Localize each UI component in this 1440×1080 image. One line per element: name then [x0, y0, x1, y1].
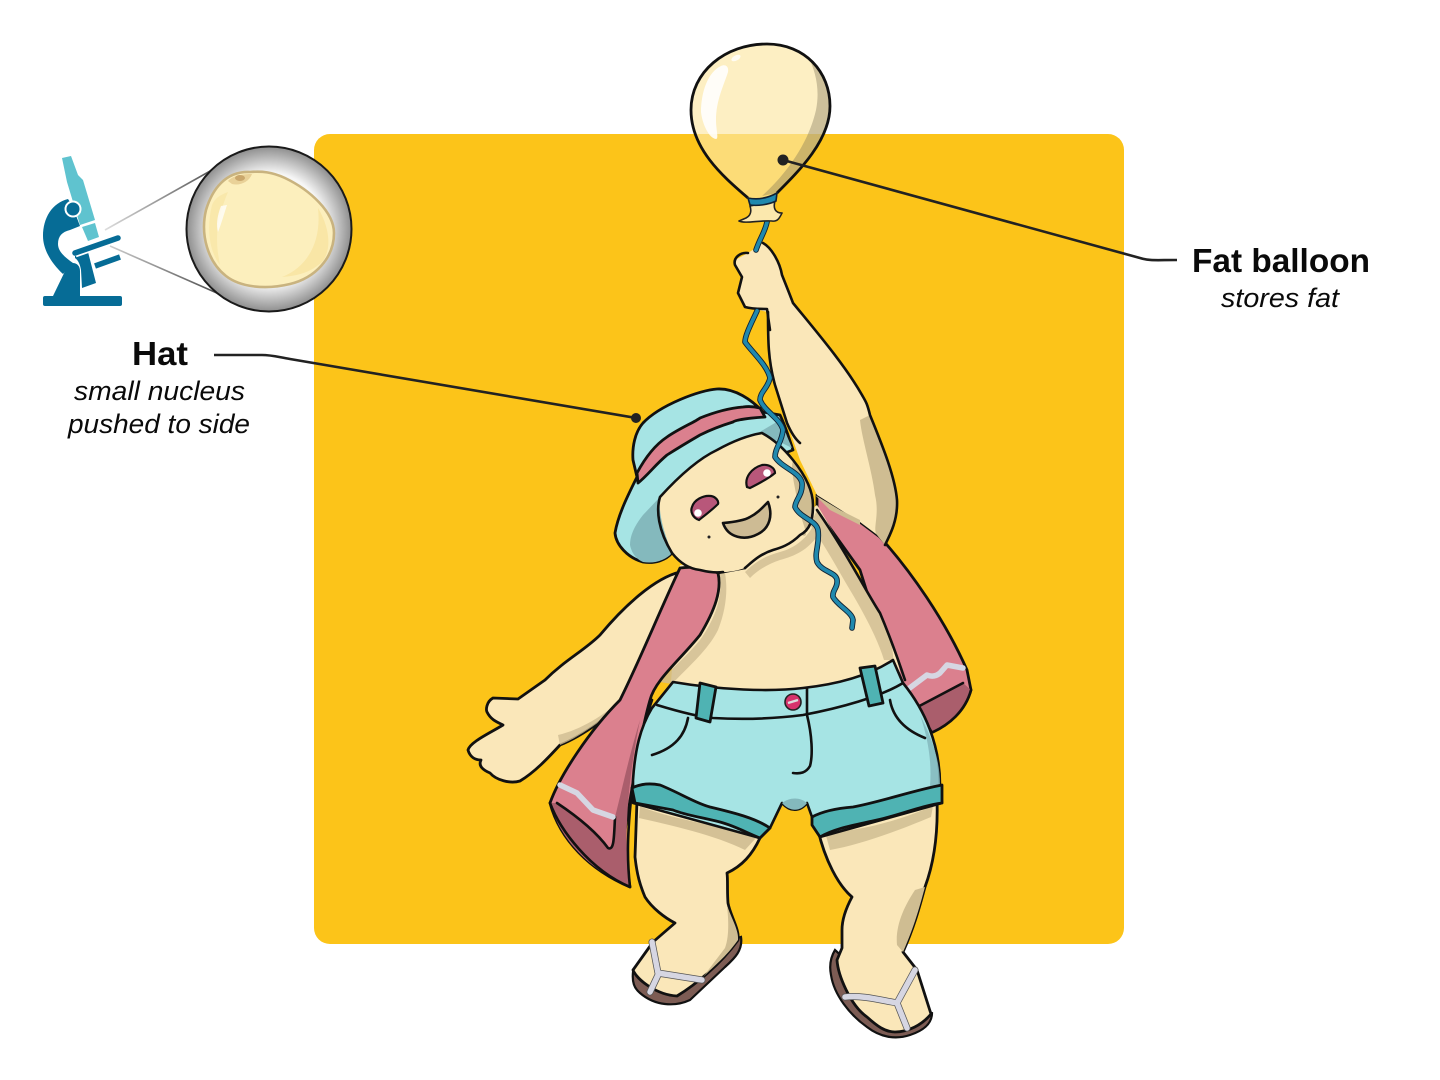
label: Hat: small nucleus — [74, 376, 245, 406]
label: Fat balloon: Fat balloon — [1192, 242, 1370, 279]
leader line: Fat balloon — [778, 154, 1177, 260]
right pocket — [890, 700, 925, 738]
character: fat cell in hat with balloon — [468, 222, 971, 1037]
left vest panel — [550, 567, 719, 887]
leader line: Hat — [214, 355, 641, 423]
freckles — [708, 496, 780, 538]
right belt loop — [860, 666, 883, 706]
label: Hat — [67, 335, 250, 439]
raised arm and hand — [735, 243, 897, 545]
balloon string — [745, 222, 853, 628]
label: Fat balloon: stores fat — [1221, 283, 1341, 313]
right cuff — [812, 785, 942, 837]
right eye — [746, 465, 775, 488]
right sandal strap — [845, 970, 915, 1028]
icon: microscope — [43, 156, 122, 306]
right leg and foot — [818, 800, 937, 1037]
button — [785, 694, 801, 710]
left sandal strap — [650, 942, 702, 992]
label: Hat: pushed to side — [67, 409, 250, 439]
waistband line — [657, 683, 903, 719]
hat — [615, 389, 793, 563]
right vest panel — [817, 495, 971, 732]
magnifier rays — [105, 170, 226, 297]
magnified fat cell — [186, 146, 352, 312]
left pocket — [652, 718, 688, 755]
balloon — [691, 44, 830, 222]
brim underside — [630, 497, 672, 563]
hat band — [637, 407, 765, 483]
left leg and foot — [633, 800, 760, 1004]
left arm — [468, 572, 680, 782]
smile — [723, 502, 770, 538]
label: Fat balloon — [1192, 242, 1370, 313]
fly seam — [793, 688, 812, 773]
yellow background panel — [314, 134, 1124, 944]
shorts — [632, 660, 942, 838]
left cuff — [632, 784, 770, 838]
head — [658, 433, 818, 578]
left belt loop — [696, 683, 716, 722]
left eye — [691, 496, 718, 520]
balloon knot band — [748, 193, 777, 205]
label: Hat: Hat — [132, 335, 188, 372]
torso — [660, 505, 905, 700]
balloon neck — [739, 201, 782, 222]
